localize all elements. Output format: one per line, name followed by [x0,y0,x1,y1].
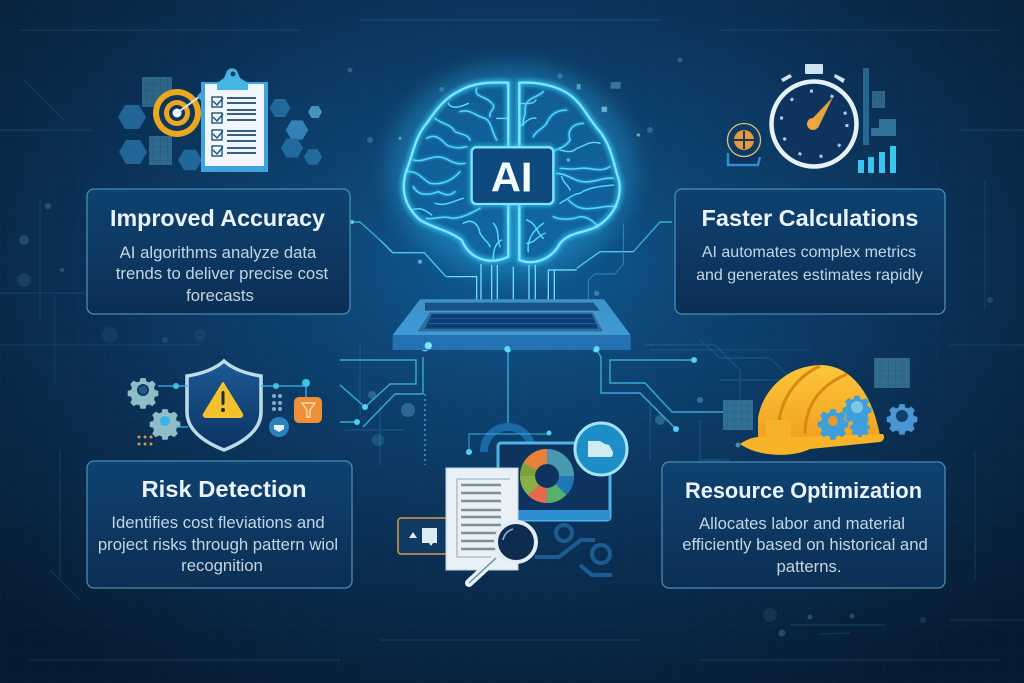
circuit connectors [340,220,723,465]
gears [128,378,158,409]
panel: resource optimization [662,462,945,588]
icon: shield with warning [128,361,322,450]
circuit ornament [535,525,612,575]
body: efficiently based on historical and [682,535,928,554]
bar chart [858,68,896,173]
connector pins [380,223,633,306]
donut chart [527,456,566,496]
brain outline [404,82,620,262]
AI chip [472,147,553,204]
orange chip [294,397,322,423]
body: AI automates complex metrics [702,244,916,261]
cloud badge [575,423,627,475]
body: AI algorithms analyze data [120,243,317,262]
body: forecasts [186,286,254,305]
processor platform [393,299,631,352]
glow particles [399,73,640,296]
data blocks [142,77,172,165]
small label panel [398,518,458,554]
body: Identifies cost fleviations and [111,513,325,532]
magnifier [469,558,496,583]
monitor [498,443,610,520]
heading: Resource Optimization [685,478,922,503]
body: project risks through pattern wiol [98,535,338,554]
heading: Risk Detection [142,476,306,502]
body: trends to deliver precise cost [116,264,329,283]
icon: stopwatch [727,64,896,173]
hexagons [118,99,322,170]
icon: hard hat with gears [723,358,917,455]
AI chip: AI [491,154,532,201]
panel: risk detection [87,461,352,588]
document [446,468,518,570]
brain folds [407,88,617,258]
heading: Faster Calculations [702,205,918,231]
icon: dashboard, document and magnifier [398,423,627,583]
target [153,87,210,137]
icon: target and clipboard [118,68,322,172]
clipboard [201,68,268,172]
body: and generates estimates rapidly [696,267,923,284]
body: recognition [181,556,263,575]
body: patterns. [777,557,841,576]
panel: improved accuracy [87,189,350,314]
small badge [727,124,761,165]
brain with AI chip [380,63,640,306]
heading: Improved Accuracy [110,205,325,231]
body: Allocates labor and material [699,514,905,533]
panel: faster calculations [675,189,945,314]
